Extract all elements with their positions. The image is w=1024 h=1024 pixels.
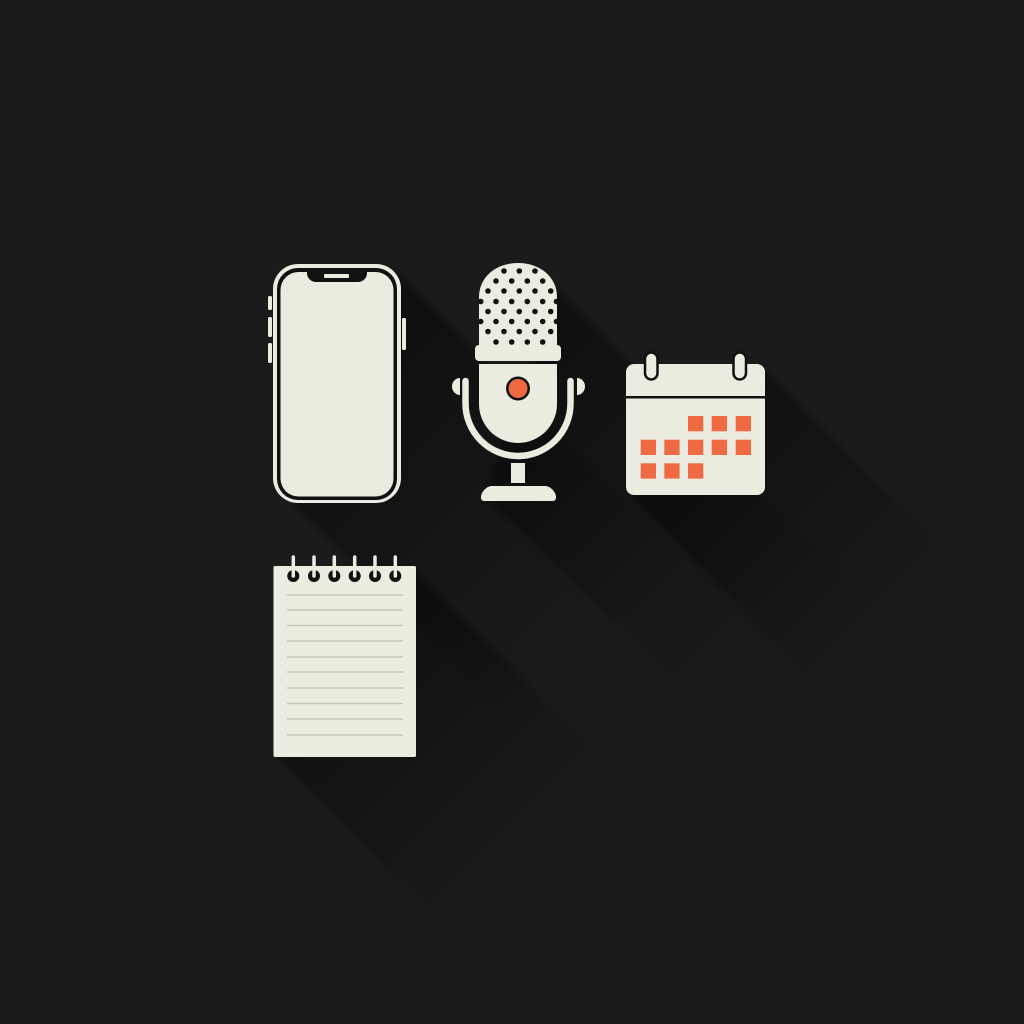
microphone cradle: [466, 381, 570, 456]
cradle side clips: [452, 378, 460, 395]
grille dots: [478, 268, 559, 345]
phone notch: [307, 270, 367, 282]
icon: spiral notepad: [274, 557, 416, 757]
notepad spiral holes: [287, 570, 401, 582]
long shadows: [276, 270, 945, 950]
phone body: [273, 264, 401, 503]
record button: [506, 376, 530, 400]
calendar date squares: [641, 416, 751, 479]
microphone body: [479, 364, 557, 443]
microphone base: [481, 486, 556, 501]
notepad ruled lines: [287, 595, 403, 735]
phone screen: [280, 272, 394, 496]
calendar header divider: [626, 396, 765, 398]
icon: smartphone: [268, 264, 406, 503]
notepad page: [274, 566, 416, 757]
calendar binder rings: [645, 352, 746, 380]
microphone grille: [479, 263, 557, 345]
phone side buttons: [268, 296, 406, 363]
calendar page: [626, 364, 765, 495]
microphone stem: [511, 463, 525, 483]
notepad spiral wires: [293, 557, 395, 576]
icon: calendar: [626, 352, 765, 495]
icon: microphone: [452, 263, 585, 501]
phone speaker: [324, 274, 349, 278]
microphone band: [475, 345, 561, 361]
illustration: four flat icons on a dark background: [268, 263, 810, 786]
